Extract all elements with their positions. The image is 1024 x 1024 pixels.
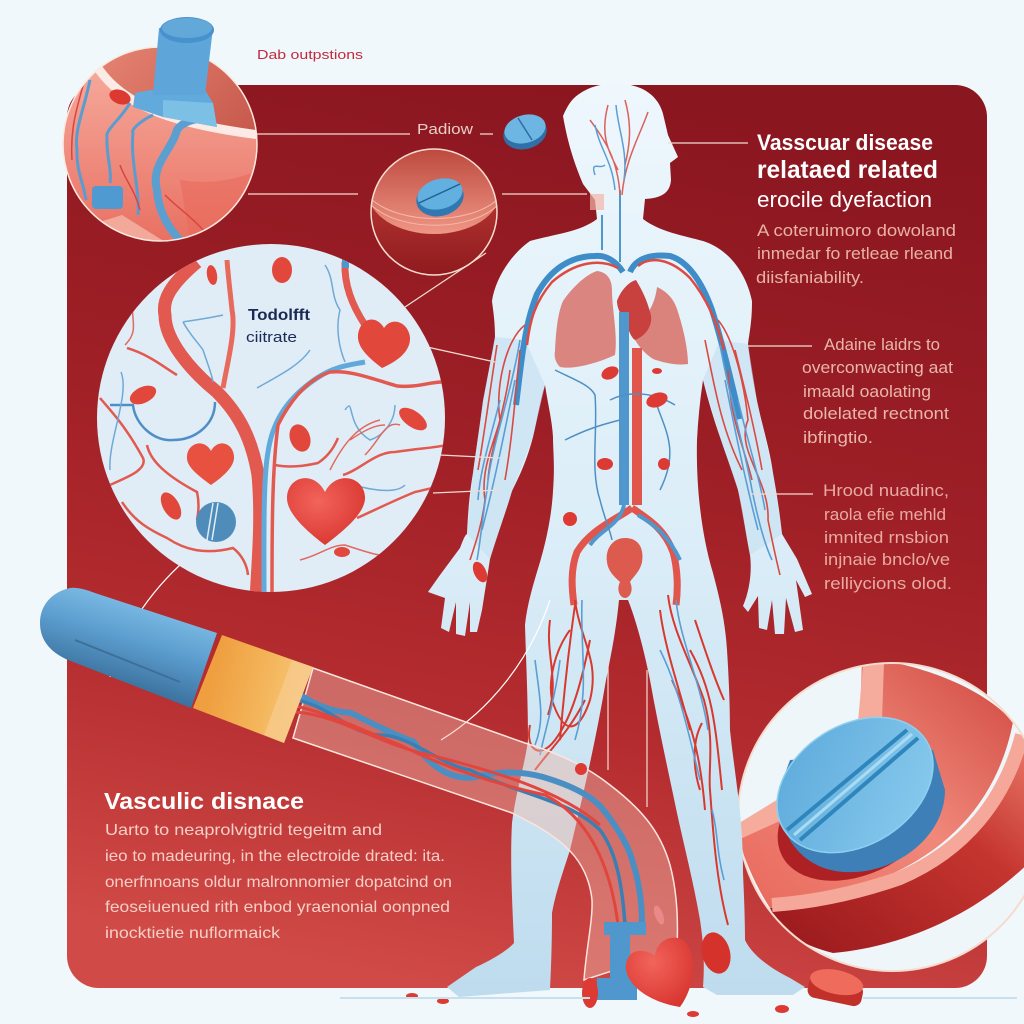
- heading: vascular disease: Vasscuar disease: [757, 130, 933, 155]
- text block: lower right: imnited rnsbion: [824, 528, 949, 547]
- arm vessels right blue: [720, 345, 772, 560]
- text block: top right: [756, 221, 956, 287]
- thick red artery: [164, 262, 260, 600]
- text block: vascular disease lower left: inocktietie nuflormaick: [105, 925, 281, 942]
- text block: vascular disease lower left: feoseiuenued rith enbod yraenonial oonpned: [105, 899, 450, 916]
- iliac fork: [572, 508, 677, 605]
- heart organ: [617, 280, 651, 340]
- artery rim highlight: [98, 68, 260, 135]
- body silhouette: [428, 84, 812, 997]
- leader lines: [110, 134, 813, 807]
- text block: top right: inmedar fo retleae rleand: [757, 244, 953, 263]
- label: drug name: ciitrate: [246, 329, 297, 346]
- panel: large pill magnifier: [736, 660, 1024, 971]
- top vessel: [345, 262, 365, 325]
- head vessels: [590, 100, 648, 195]
- human body figure: [428, 84, 812, 997]
- red cells: [127, 257, 431, 557]
- red trunk: [272, 372, 442, 595]
- pale pill in tube: [652, 904, 666, 926]
- text block: vascular disease lower left: onerfnnoans oldur malronnomier dopatcind on: [105, 874, 452, 891]
- disc top face: [368, 150, 500, 234]
- label: drug name: Todolfft: [248, 307, 311, 324]
- thick blue vessel: [152, 120, 197, 240]
- pill shadow: [778, 823, 898, 881]
- leg vessels right red: [660, 595, 728, 925]
- heart: [287, 478, 365, 545]
- icon: red tissue disc with pill: [368, 149, 500, 275]
- neck vessels: [602, 190, 620, 262]
- bowl surface: [738, 660, 1013, 908]
- small header label: Dab outpstions: [257, 47, 364, 62]
- text block: vascular disease lower left: [104, 788, 452, 942]
- red branches: [100, 348, 446, 575]
- red vessels: [290, 705, 618, 925]
- ground lines: [340, 997, 1017, 999]
- heading: vascular disease: relataed related: [757, 156, 938, 184]
- blue trunk: [264, 362, 365, 595]
- second red artery: [223, 260, 233, 388]
- arm shading: [467, 337, 782, 559]
- capsule highlight: [75, 640, 180, 682]
- thin blue arc: [110, 402, 215, 440]
- dots: [406, 763, 789, 1017]
- heart: [626, 938, 693, 1007]
- red cell: [109, 89, 131, 105]
- heading: vascular disease: erocile dyefaction: [757, 187, 932, 212]
- text block: middle right: ibfingtio.: [803, 428, 873, 447]
- bottom hearts and cells: [406, 763, 867, 1017]
- leg vessels left blue: [535, 600, 583, 755]
- arm vessels right: [705, 320, 780, 575]
- vessels in tube blue: [293, 690, 642, 925]
- icon: small blue pill: [500, 110, 550, 154]
- blood cells: [470, 364, 670, 585]
- heart: [187, 443, 234, 485]
- text block: top right: A coteruimoro dowoland: [757, 221, 956, 240]
- text block: middle right: Adaine laidrs to: [824, 335, 940, 354]
- pink stripe left: [740, 800, 779, 838]
- leg vessels right blue: [660, 600, 724, 880]
- panel: top-left artery magnifier: [60, 17, 260, 250]
- text block: middle right: dolelated rectnont: [803, 404, 949, 423]
- central vessel red: [632, 348, 642, 505]
- transparent tube: [293, 668, 677, 980]
- label: drug name: [246, 307, 311, 346]
- arm vessels left: [470, 325, 525, 560]
- text block: vascular disease lower left: ieo to madeuring, in the electroide drated: ita.: [105, 848, 445, 865]
- right lung: [630, 287, 688, 365]
- label: Padiow: Padiow: [417, 121, 473, 138]
- panel: large circle of vessels: [97, 244, 446, 600]
- text block: lower right: raola efie mehld: [824, 505, 946, 524]
- gold band: [193, 635, 313, 743]
- text block: top right: diisfaniability.: [756, 268, 864, 287]
- thin blue vessels: [110, 265, 405, 490]
- text block: lower right: [823, 481, 952, 593]
- icon: neck patch: [590, 194, 604, 210]
- blue tablet: [752, 690, 958, 880]
- thin blue vessels: [76, 80, 153, 215]
- aortic arch blue: [516, 256, 623, 405]
- lower tissue: [102, 215, 162, 240]
- tablet on disc: [412, 174, 468, 222]
- arm vessels left blue: [477, 340, 520, 560]
- torso vessels: [555, 370, 675, 540]
- thin red vessels: [125, 300, 400, 560]
- blue pill cell: [196, 502, 236, 542]
- central aorta blue: [619, 312, 629, 505]
- text block: lower right: Hrood nuadinc,: [823, 481, 949, 500]
- text block: middle right: overconwacting aat: [802, 358, 953, 377]
- blue box: [92, 186, 123, 209]
- capsule and bent tube: [40, 588, 677, 1000]
- left lung: [555, 271, 616, 368]
- text block: middle right: [802, 335, 953, 447]
- text block: vascular disease lower left: Vasculic disnace: [104, 788, 304, 814]
- text block: lower right: injnaie bnclo/ve: [824, 550, 950, 569]
- panel: red background: [67, 85, 987, 988]
- gold rim: [264, 660, 313, 743]
- blue connector: [597, 922, 646, 1000]
- pink artery shade: [180, 173, 252, 222]
- heart: [358, 320, 410, 368]
- text block: vascular disease lower left: Uarto to neaprolvigtrid tegeitm and: [105, 822, 382, 839]
- thin red vessel: [72, 75, 205, 232]
- heading: vascular disease: [757, 130, 938, 212]
- dark underside: [770, 753, 1024, 953]
- aortic arch red: [527, 260, 724, 350]
- blue clamp: [133, 17, 217, 127]
- second blue vessel: [295, 700, 625, 925]
- ring cell: [697, 929, 735, 977]
- bladder organ: [607, 538, 642, 598]
- artery band: [64, 72, 256, 240]
- pink stripe rim: [772, 735, 1022, 905]
- leg vessels left red: [529, 600, 593, 770]
- capsule blue body: [40, 588, 217, 708]
- text block: middle right: imaald oaolating: [803, 382, 931, 401]
- text block: lower right: relliycions olod.: [824, 574, 952, 593]
- ring cell small: [582, 978, 598, 1008]
- pink stripe top: [858, 663, 884, 722]
- disk: [806, 965, 867, 1008]
